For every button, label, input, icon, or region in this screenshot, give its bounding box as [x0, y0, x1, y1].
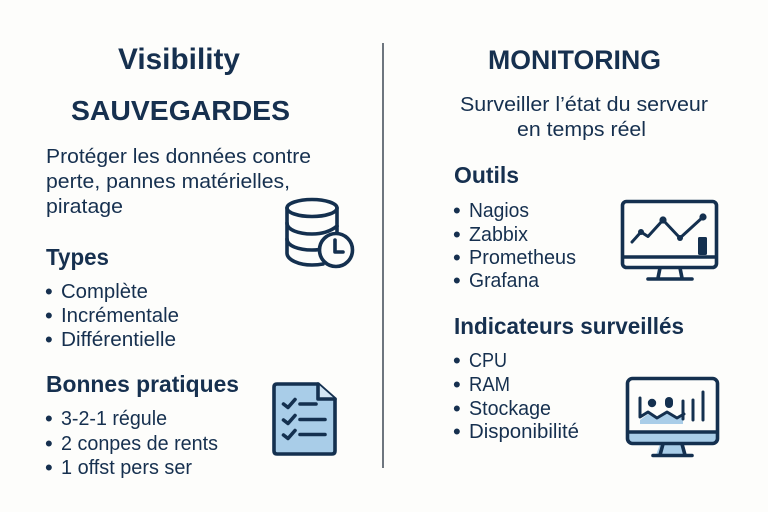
list: bonnes pratiques: •: [45, 431, 53, 456]
heading: Bonnes pratiques: Bonnes pratiques: [46, 371, 239, 397]
list: types: Différentielle: [61, 329, 176, 351]
list: outils: •: [453, 222, 461, 247]
heading: Visibility: Visibility: [118, 43, 240, 76]
list: types: •: [45, 327, 53, 352]
list: bonnes pratiques: •: [45, 406, 53, 431]
icon: monitor with line chart: [622, 202, 716, 279]
list: outils: Grafana: [469, 270, 540, 292]
heading: SAUVEGARDES: SAUVEGARDES: [71, 95, 290, 126]
list: indicateurs: •: [453, 396, 461, 421]
icon: checklist document: [274, 384, 335, 454]
list: types: •: [45, 303, 53, 328]
list: outils: Nagios: [469, 200, 529, 222]
list: bonnes pratiques: 3-2-1 régule: [61, 408, 167, 430]
icon: monitor with area chart: [628, 378, 718, 456]
list: types: Complète: [61, 281, 148, 303]
text block: description: [46, 145, 311, 218]
list: outils: •: [453, 198, 461, 223]
list: indicateurs: •: [453, 372, 461, 397]
text block: subtitle: Surveiller l’état du serveur: [460, 93, 708, 116]
list: indicateurs: •: [453, 348, 461, 373]
panel: monitoring: [453, 45, 718, 456]
list: outils: Prometheus: [469, 247, 576, 269]
list: bonnes pratiques: 2 conpes de rents: [61, 433, 218, 455]
text block: subtitle: [460, 93, 708, 141]
heading: Indicateurs surveillés: Indicateurs surveillés: [454, 313, 684, 339]
text block: description: piratage: [46, 195, 123, 218]
list: indicateurs: [453, 348, 579, 444]
list: types: [45, 279, 179, 352]
list: outils: •: [453, 245, 461, 270]
list: indicateurs: CPU: [469, 350, 507, 372]
icon: database with clock: [287, 200, 352, 266]
list: indicateurs: •: [453, 419, 461, 444]
list: types: Incrémentale: [61, 305, 179, 327]
text block: description: perte, pannes matérielles,: [46, 170, 290, 193]
heading: MONITORING: MONITORING: [488, 45, 661, 75]
list: outils: Zabbix: [469, 224, 528, 246]
heading: Outils: Outils: [454, 162, 519, 188]
list: indicateurs: Disponibilité: [469, 421, 579, 443]
text block: subtitle: en temps réel: [517, 118, 646, 141]
list: indicateurs: RAM: [469, 374, 510, 396]
list: bonnes pratiques: 1 offst pers ser: [61, 457, 192, 479]
list: indicateurs: Stockage: [469, 398, 551, 420]
list: bonnes pratiques: •: [45, 455, 53, 480]
list: outils: •: [453, 268, 461, 293]
panel: sauvegardes: [45, 43, 352, 480]
list: outils: [453, 198, 576, 293]
heading: Types: Types: [46, 244, 109, 270]
list: bonnes pratiques: [45, 406, 218, 480]
list: types: •: [45, 279, 53, 304]
text block: description: Protéger les données contre: [46, 145, 311, 168]
